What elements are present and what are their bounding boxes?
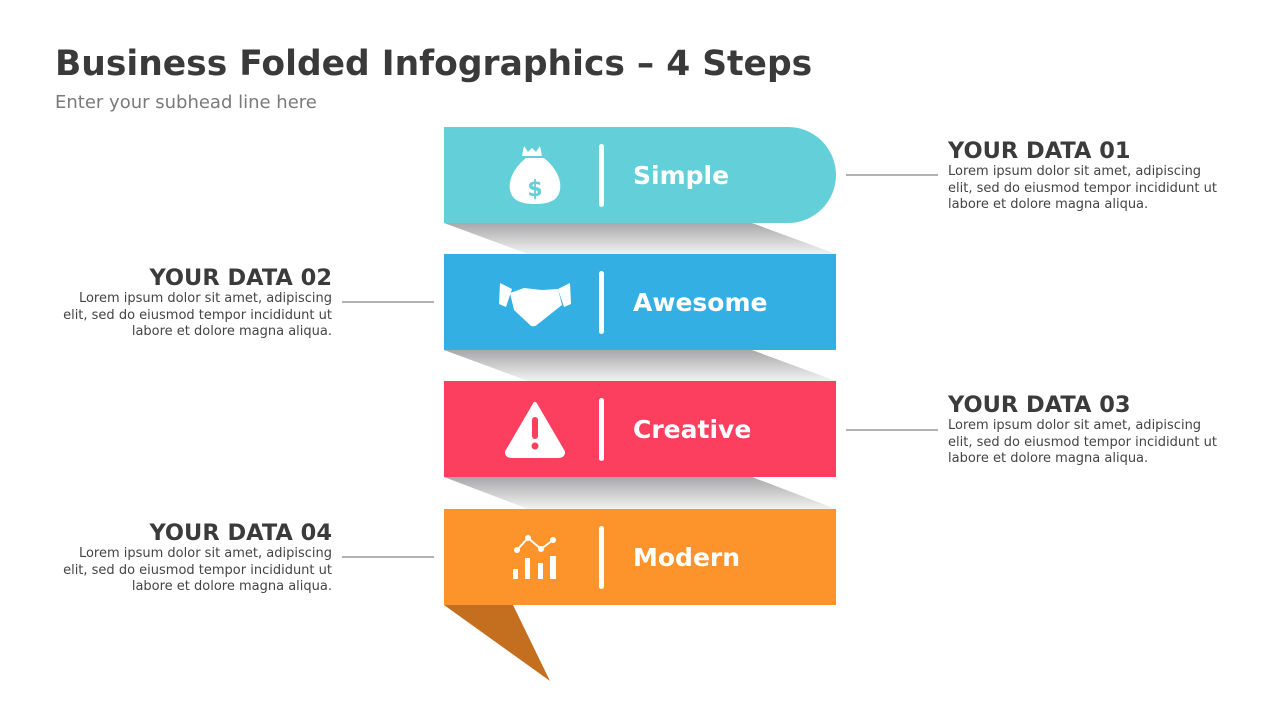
icon: warning bbox=[507, 404, 563, 456]
band 3: Creative bbox=[444, 381, 836, 477]
band 4: Modern: Modern bbox=[633, 543, 740, 572]
text block 04: elit, sed do eiusmod tempor incididunt ut bbox=[63, 562, 332, 578]
text block 02 bbox=[63, 265, 332, 339]
text block 03: elit, sed do eiusmod tempor incididunt ut bbox=[948, 434, 1217, 450]
text block 03: labore et dolore magna aliqua. bbox=[948, 451, 1148, 466]
connector lines bbox=[342, 175, 938, 557]
text block 02: YOUR DATA 02 bbox=[149, 265, 332, 291]
text block 02: labore et dolore magna aliqua. bbox=[132, 324, 332, 339]
text block 03 bbox=[948, 392, 1217, 466]
text block 01 bbox=[948, 138, 1217, 212]
band 2: Awesome: Awesome bbox=[633, 288, 767, 317]
text block 01: YOUR DATA 01 bbox=[948, 138, 1131, 164]
text block 04 bbox=[63, 520, 332, 594]
text block 02: Lorem ipsum dolor sit amet, adipiscing bbox=[79, 291, 332, 306]
text block 03: YOUR DATA 03 bbox=[948, 392, 1131, 418]
text block 04: labore et dolore magna aliqua. bbox=[132, 579, 332, 594]
text block 01: labore et dolore magna aliqua. bbox=[948, 197, 1148, 212]
icon: money bag: $ bbox=[527, 177, 543, 202]
text block 01: elit, sed do eiusmod tempor incididunt ut bbox=[948, 180, 1217, 196]
text block 03: Lorem ipsum dolor sit amet, adipiscing bbox=[948, 418, 1201, 433]
icon: chart bbox=[513, 535, 556, 579]
icon: money bag bbox=[510, 146, 560, 204]
folds bbox=[444, 223, 836, 681]
text block 04: YOUR DATA 04 bbox=[149, 520, 332, 546]
icon: handshake bbox=[499, 283, 571, 326]
band 4: Modern bbox=[444, 509, 836, 605]
text block 02: elit, sed do eiusmod tempor incididunt ut bbox=[63, 308, 332, 322]
band 1: Simple: Simple bbox=[633, 161, 729, 190]
text block 01: Lorem ipsum dolor sit amet, adipiscing bbox=[948, 164, 1201, 179]
subtitle: Enter your subhead line here bbox=[55, 92, 317, 113]
title: Business Folded Infographics – 4 Steps bbox=[55, 44, 812, 84]
band 3: Creative: Creative bbox=[633, 415, 751, 444]
text block 04: Lorem ipsum dolor sit amet, adipiscing bbox=[79, 546, 332, 561]
band 2: Awesome bbox=[444, 254, 836, 350]
band 1: Simple bbox=[444, 127, 836, 223]
